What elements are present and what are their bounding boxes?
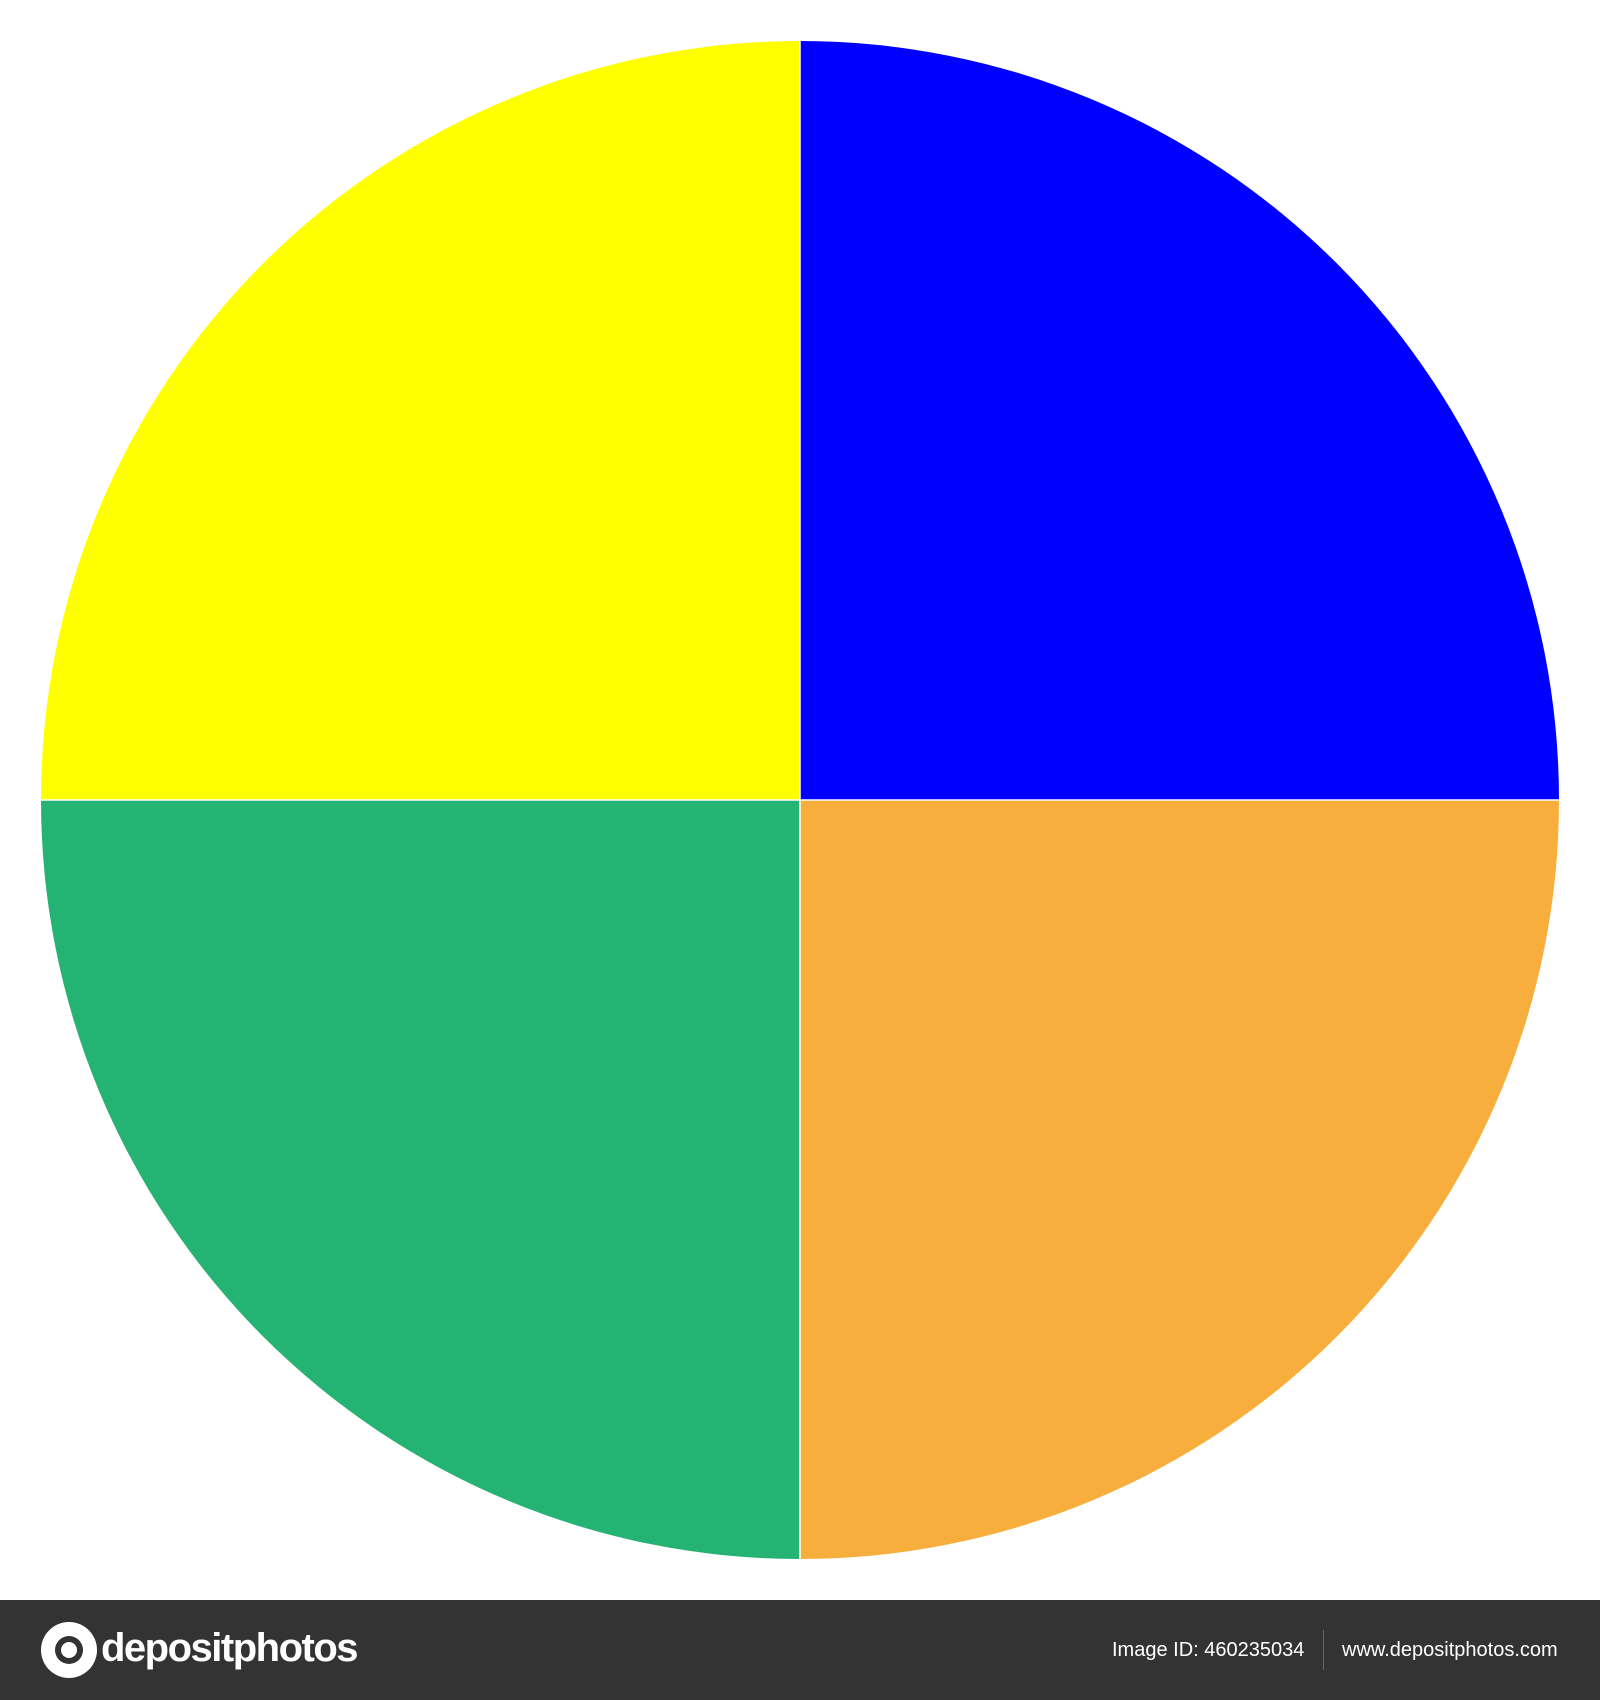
- icon: camera: [41, 1622, 97, 1678]
- quadrant: orange bottom-right: [800, 800, 1559, 1559]
- logo text: depositphotos: [101, 1626, 357, 1670]
- quadrant: blue top-right: [800, 41, 1559, 800]
- image id: Image ID: 460235034: [1112, 1639, 1304, 1661]
- logo: [41, 1622, 357, 1678]
- footer bar: [0, 1600, 1600, 1700]
- quadrant: green bottom-left: [41, 800, 800, 1559]
- quadrant: yellow top-left: [41, 41, 800, 800]
- url: www.depositphotos.com: [1342, 1639, 1558, 1661]
